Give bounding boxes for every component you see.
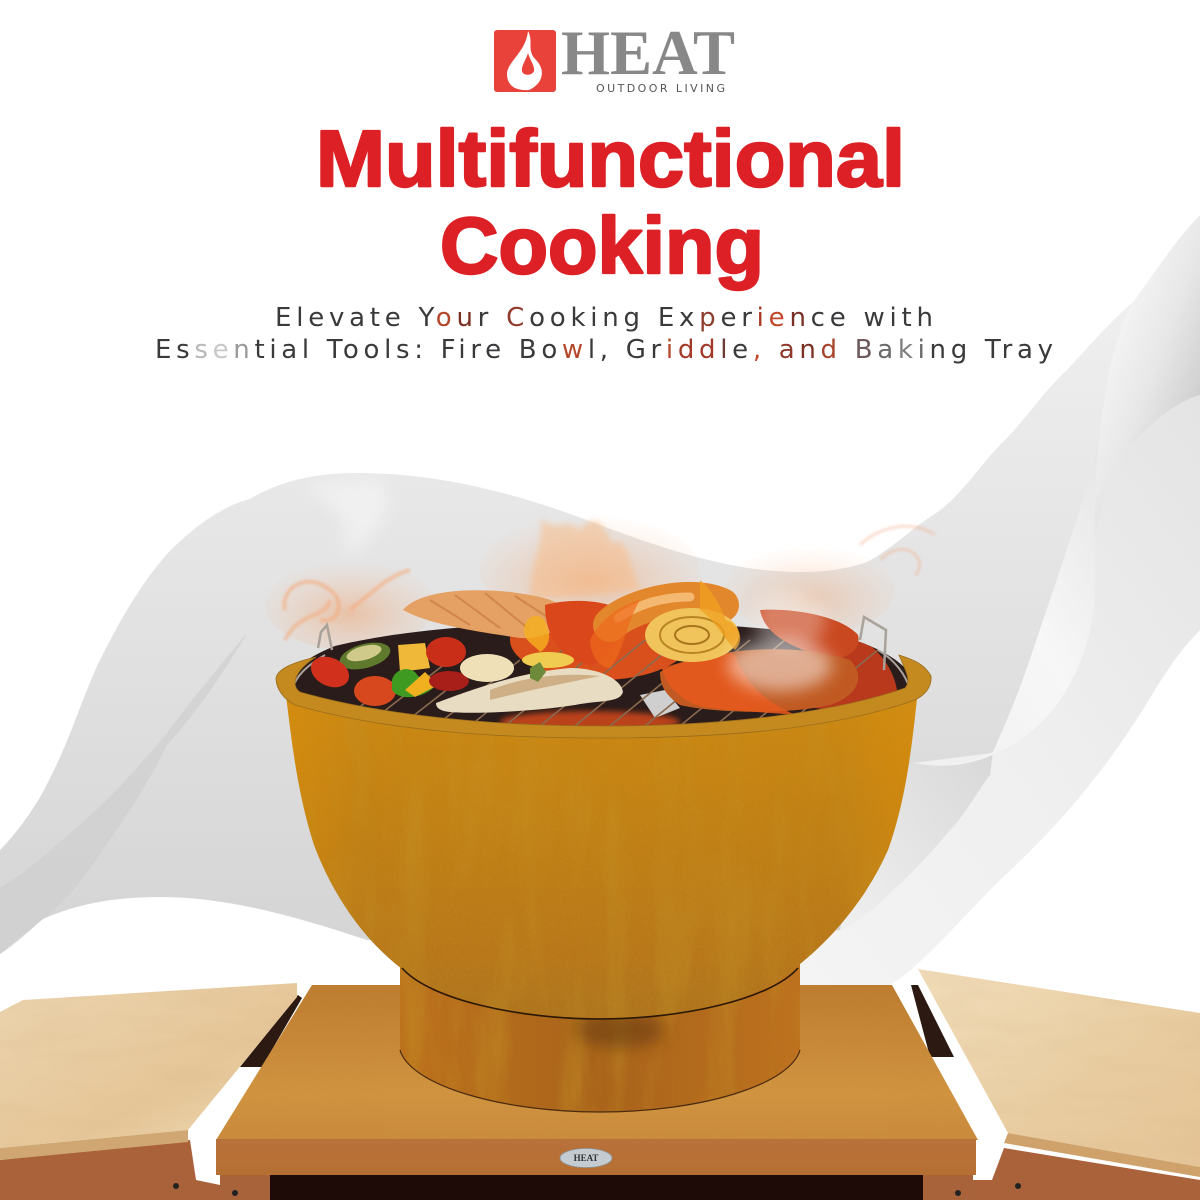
left screw 2 [232, 1190, 238, 1196]
food: sausage [610, 599, 722, 625]
title line 2: Cooking [440, 201, 764, 290]
wave: upper right ribbon [1095, 215, 1200, 502]
wave: left fold [0, 633, 247, 954]
right wood: top [918, 969, 1200, 1167]
food: smoke plume [754, 590, 826, 650]
grill: lower ember glow [500, 711, 680, 733]
food: right sausage [760, 610, 859, 658]
logo: red square [494, 30, 556, 92]
title line 1: Multifunctional [316, 114, 905, 203]
title [316, 114, 905, 290]
table: metal badge: HEAT [574, 1153, 598, 1163]
food: salmon char marks [430, 593, 555, 630]
bowl: front rim [276, 655, 931, 738]
grill: ember glow [510, 622, 677, 680]
right screw 2 [955, 1190, 961, 1196]
table: dark opening [270, 1175, 923, 1200]
food: tomato [354, 676, 396, 706]
bowl body [270, 655, 931, 1025]
food: red meat [545, 601, 621, 665]
left bracket [0, 1140, 220, 1200]
right bracket [973, 1148, 1200, 1200]
grill: grate wires [360, 640, 878, 726]
left handle [318, 625, 332, 650]
back flames: left [265, 560, 435, 650]
left wooden side table [0, 980, 300, 1200]
back flames: right [725, 545, 895, 635]
grill interior [295, 622, 908, 726]
smoke wisps [300, 480, 386, 560]
food: white smoke over steak [728, 639, 832, 691]
right wooden side table [915, 965, 1200, 1200]
table: metal badge [560, 1148, 612, 1168]
background wave [0, 215, 1200, 986]
logo: flame icon [507, 31, 542, 90]
food: zucchini [337, 638, 393, 674]
wave: main grey ribbon [0, 302, 1133, 960]
food: yellow flames [524, 616, 549, 652]
food: steak [660, 649, 858, 712]
food: green pepper [392, 669, 436, 697]
food: zucchini face [345, 642, 383, 664]
left wood: grain [0, 980, 300, 1160]
ring: cylinder [400, 964, 800, 1112]
subtitle line 1: Elevate Your Cooking Experience with [275, 303, 933, 333]
food: mushrooms [460, 654, 514, 682]
food: red pepper 2 [426, 637, 466, 667]
table: front face [216, 1139, 976, 1175]
stand table [210, 980, 990, 1200]
food: sausage highlight [618, 597, 690, 618]
bowl handles [318, 617, 886, 670]
food on the grill [306, 580, 859, 715]
stand base ring [395, 955, 805, 1115]
food: orange flame over grill [590, 600, 640, 668]
food: yellow pieces [522, 652, 574, 668]
subtitle line 2: Essential Tools: Fire Bowl, Griddle, and Baking Tray [155, 335, 1053, 365]
food: yellow slice [405, 672, 438, 697]
table support right [911, 985, 954, 1057]
left screw [173, 1183, 179, 1189]
grill: white coals [640, 690, 680, 718]
subtitle [155, 303, 1053, 365]
flame tongues centre [530, 518, 640, 600]
food: yellow pepper [398, 643, 430, 672]
food: flame over steak front [700, 580, 740, 650]
food: salmon [403, 590, 568, 638]
wave: shaded wedge [840, 752, 993, 932]
right wood: grain [1008, 1144, 1148, 1168]
food: flames over steak [662, 654, 796, 715]
table: top surface [216, 985, 978, 1140]
bowl: bottom shadow line [402, 968, 798, 1019]
food: chicken breast [436, 668, 623, 713]
food: herbs [530, 662, 546, 682]
wave: lower right ribbon [780, 395, 1200, 986]
flame tongues left [284, 570, 410, 640]
grill: silver basket edge [295, 650, 908, 684]
table: top mottling [210, 980, 990, 1145]
left wood: front edge [0, 1130, 188, 1160]
back flames: far right wisp [860, 526, 935, 575]
food: onion [645, 608, 739, 662]
grill: right red glow [815, 642, 897, 709]
bowl: shell [286, 699, 917, 1018]
back flames: centre [480, 515, 700, 625]
right handle [860, 617, 886, 670]
ring: lower edge [400, 1050, 800, 1112]
table support left [240, 995, 302, 1067]
grill: dark coals [296, 622, 908, 726]
logo: tagline: OUTDOOR LIVING [596, 82, 725, 95]
logo [494, 18, 735, 95]
logo: HEAT wordmark: HEAT [561, 18, 735, 88]
food: red pepper 3 [429, 671, 469, 691]
wave: white swoosh [913, 445, 1097, 766]
table: right leg [923, 1175, 973, 1200]
food: chicken grill shade [490, 675, 600, 700]
left wood: top [0, 983, 297, 1148]
flames and smoke behind the food [265, 480, 935, 650]
food: red pepper [306, 651, 354, 693]
right screw [1015, 1183, 1021, 1189]
right wood: front edge [1004, 1133, 1200, 1177]
table: left leg [220, 1175, 270, 1200]
